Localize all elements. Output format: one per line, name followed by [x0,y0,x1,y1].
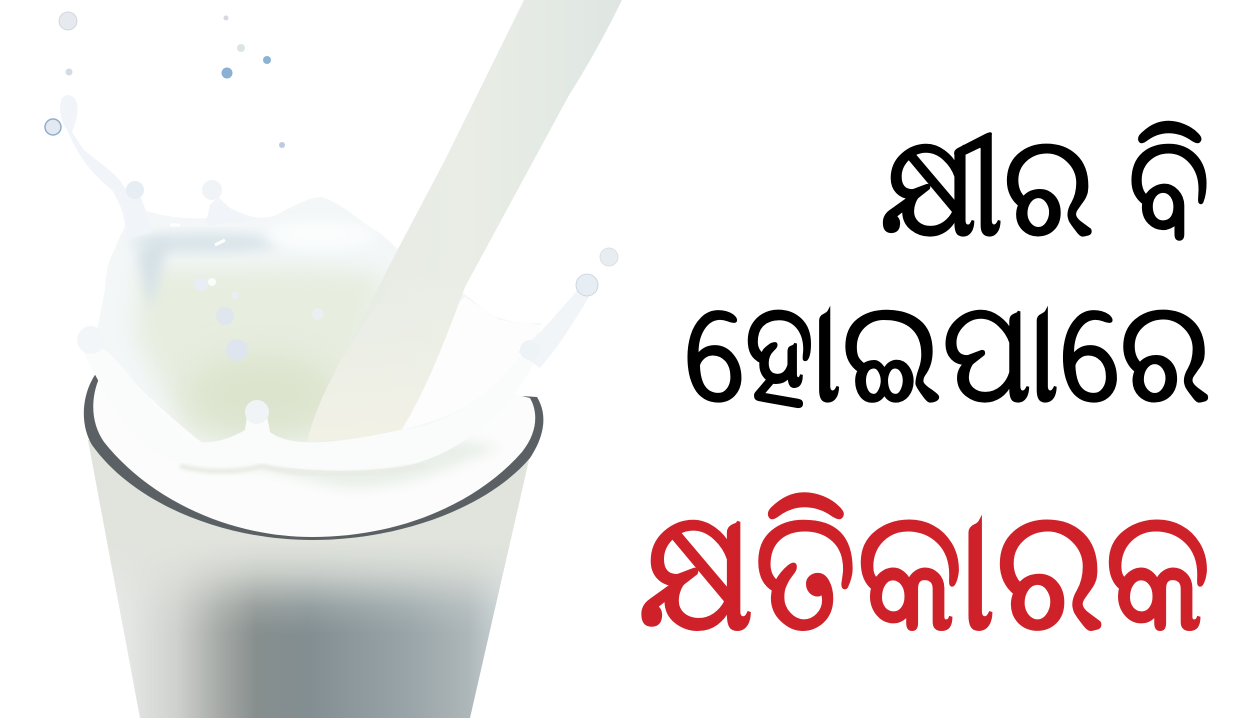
crown right arm [518,285,592,368]
illustration: glass of milk with splash [45,0,622,718]
headline text [638,107,1211,666]
milk surface [93,340,535,537]
crown front band [80,345,540,471]
glass body [88,440,530,718]
splash crown back wall [95,197,541,445]
surface shading [230,437,500,488]
droplets in air [45,12,324,361]
splash tendril left [60,95,252,240]
droplets on crown [77,248,618,424]
milk stream [307,0,622,442]
glass rim [84,368,543,540]
crown band shadow [180,465,425,474]
